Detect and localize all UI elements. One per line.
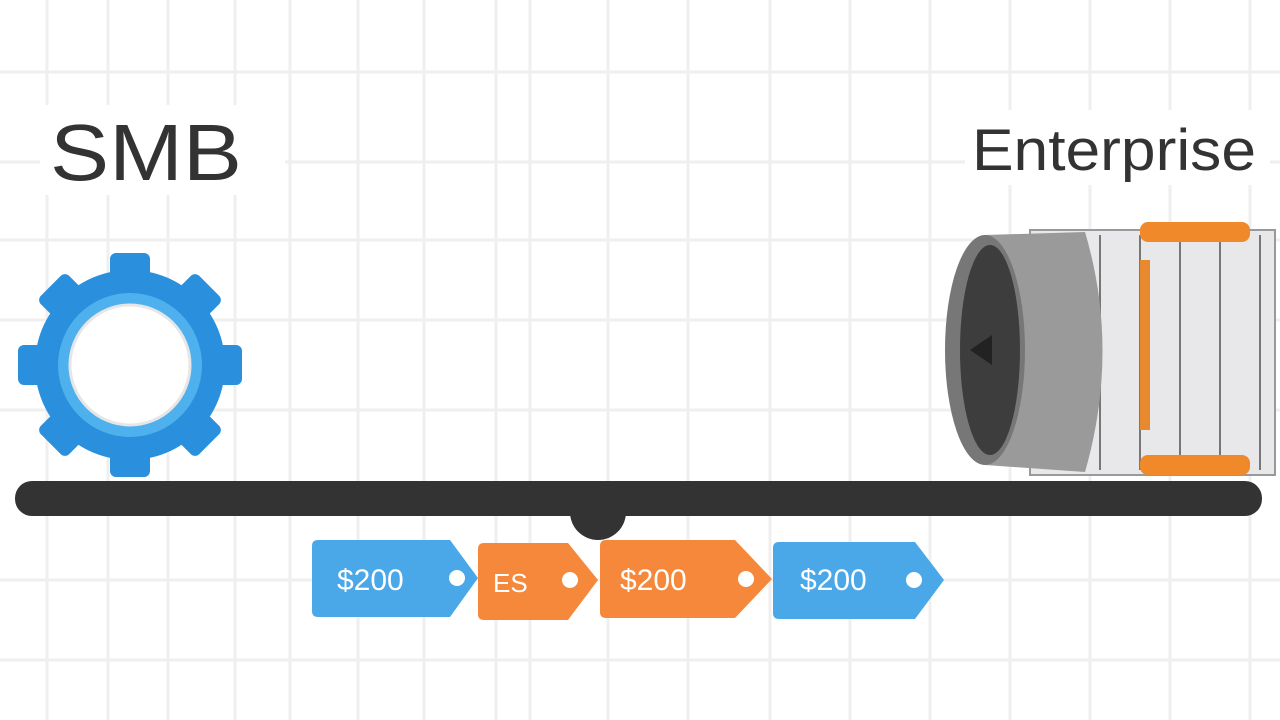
price tag 4: $200 [800,564,867,597]
icon: blue gear [18,253,242,477]
price tag 4 [773,542,944,619]
price tag 2 [478,543,598,620]
price tag 3 [600,540,772,618]
title: Enterprise: Enterprise [972,118,1256,183]
seesaw beam [15,481,1262,540]
price tag 1: $200 [337,564,404,597]
icon: enterprise server cylinder [945,222,1275,475]
price tag 2: ES [493,568,528,598]
title: SMB: SMB [50,108,242,197]
price tag 1 [312,540,478,617]
title: SMB [40,105,285,197]
price tag 3: $200 [620,564,687,597]
